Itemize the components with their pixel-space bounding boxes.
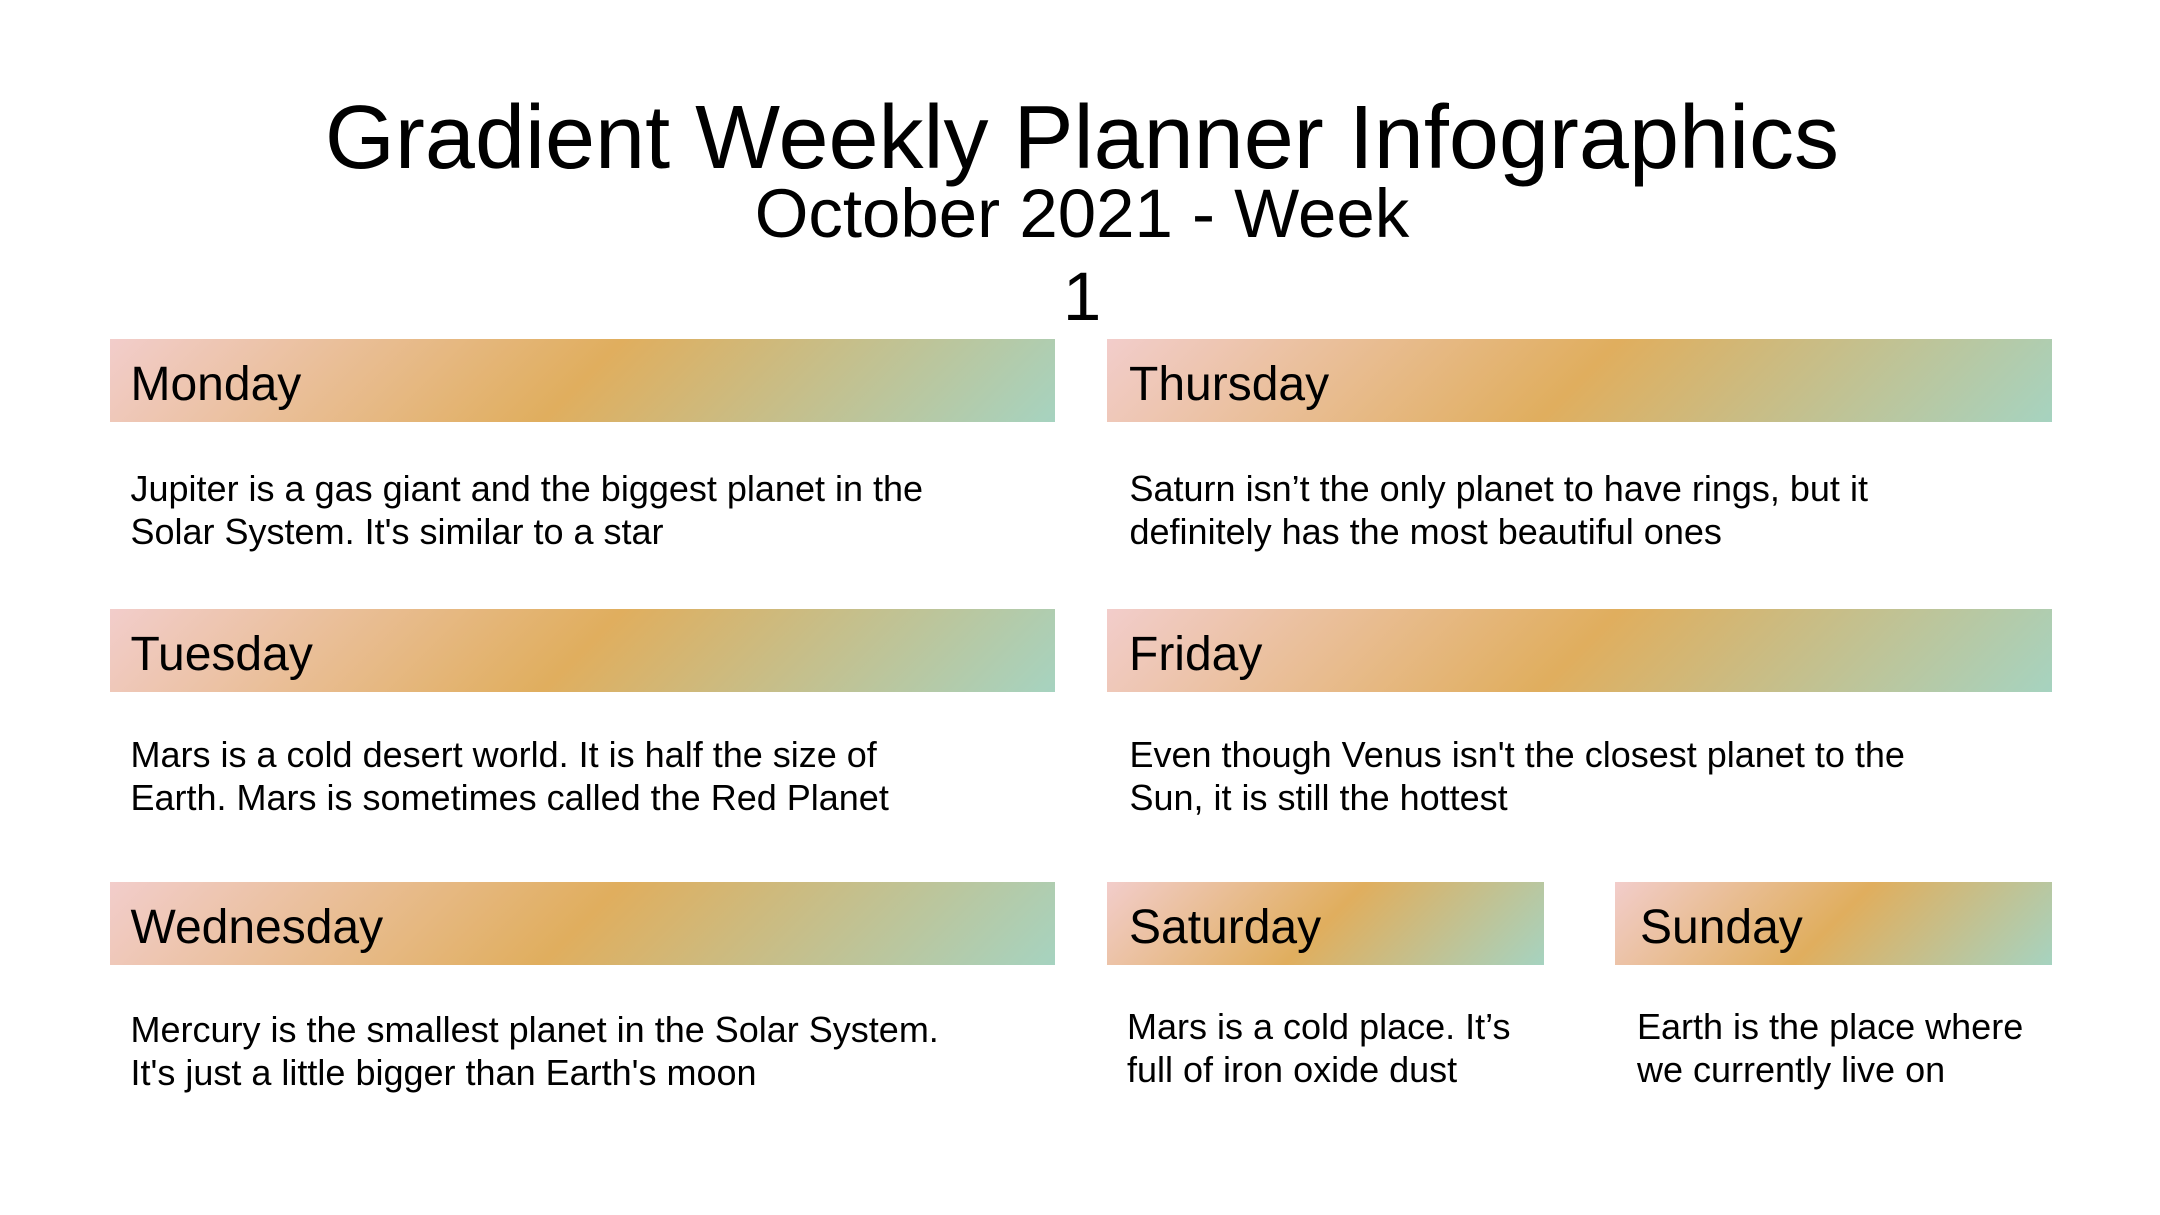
heading: Tuesday: Tuesday bbox=[130, 628, 313, 681]
text: Wednesday bbox=[130, 1009, 939, 1093]
text: Saturday: full of iron oxide dust bbox=[1127, 1049, 1457, 1090]
heading: Saturday: Saturday bbox=[1129, 901, 1321, 954]
panel: Sunday header bbox=[1615, 882, 2052, 965]
title: Gradient Weekly Planner Infographics bbox=[325, 88, 1839, 188]
panel: Monday header bbox=[110, 339, 1055, 422]
text: Tuesday: Mars is a cold desert world. It is half the size of bbox=[130, 734, 877, 775]
panel: Wednesday header bbox=[110, 882, 1055, 965]
panel: Friday header bbox=[1107, 609, 2052, 692]
panel: Tuesday header bbox=[110, 609, 1055, 692]
text: Thursday bbox=[1130, 468, 1868, 552]
panel: Saturday header bbox=[1107, 882, 1544, 965]
subtitle bbox=[755, 175, 1410, 335]
text: Sunday: Earth is the place where bbox=[1637, 1006, 2023, 1047]
subtitle: October 2021 - Week bbox=[755, 175, 1409, 252]
text: Friday: Sun, it is still the hottest bbox=[1130, 777, 1508, 818]
heading: Thursday: Thursday bbox=[1129, 358, 1329, 411]
text: Saturday: Mars is a cold place. It’s bbox=[1127, 1006, 1510, 1047]
text: Sunday bbox=[1637, 1006, 2023, 1090]
heading: Monday: Monday bbox=[130, 358, 301, 411]
text: Wednesday: Mercury is the smallest planet in the Solar System. bbox=[130, 1009, 939, 1050]
heading: Friday: Friday bbox=[1129, 628, 1262, 681]
text: Thursday: definitely has the most beautiful ones bbox=[1130, 511, 1722, 552]
text: Wednesday: It's just a little bigger than Earth's moon bbox=[130, 1052, 757, 1093]
text: Friday: Even though Venus isn't the closest planet to the bbox=[1130, 734, 1905, 775]
text: Tuesday bbox=[130, 734, 889, 818]
panel: Thursday header bbox=[1107, 339, 2052, 422]
text: Monday bbox=[130, 468, 923, 552]
heading: Sunday: Sunday bbox=[1640, 901, 1803, 954]
text: Friday bbox=[1130, 734, 1905, 818]
text: Tuesday: Earth. Mars is sometimes called the Red Planet bbox=[130, 777, 889, 818]
text: Saturday bbox=[1127, 1006, 1510, 1090]
text: Sunday: we currently live on bbox=[1637, 1049, 1945, 1090]
subtitle: 1 bbox=[1063, 258, 1101, 335]
text: Monday: Solar System. It's similar to a star bbox=[130, 511, 664, 552]
heading: Wednesday: Wednesday bbox=[130, 901, 383, 954]
text: Monday: Jupiter is a gas giant and the biggest planet in the bbox=[130, 468, 923, 509]
text: Thursday: Saturn isn’t the only planet to have rings, but it bbox=[1130, 468, 1868, 509]
